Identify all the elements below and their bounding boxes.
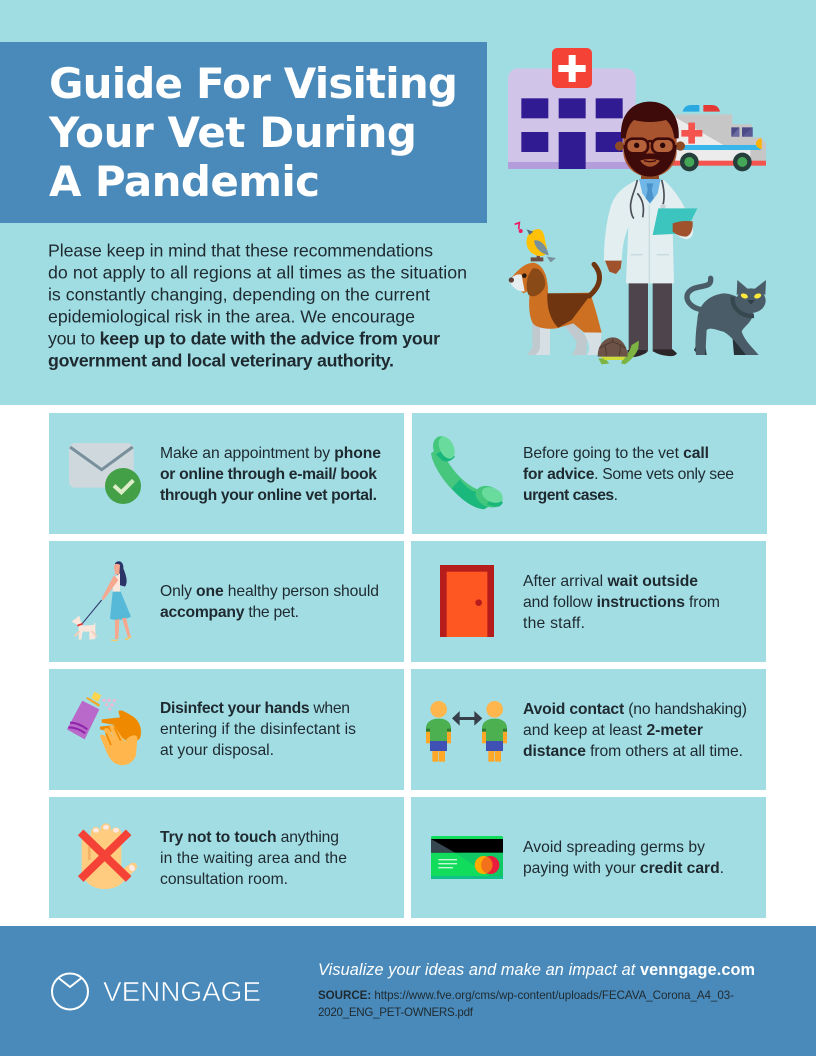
panel: call for advice bbox=[412, 413, 767, 534]
hero illustration: vet with hospital, ambulance and pets bbox=[508, 48, 766, 364]
text: do not touch: Try not to touch anything bbox=[160, 829, 339, 846]
text: appointment: or online through e-mail/ book bbox=[160, 466, 377, 483]
text: disinfect: at your disposal. bbox=[160, 742, 274, 759]
panel: credit card bbox=[411, 797, 766, 918]
text: call bbox=[523, 445, 734, 504]
text: call: Before going to the vet call bbox=[523, 445, 709, 462]
source citation bbox=[318, 989, 734, 1019]
text: do not touch: in the waiting area and the bbox=[160, 850, 347, 867]
text: avoid contact: distance from others at all time. bbox=[523, 743, 743, 760]
intro text block: government and local veterinary authority. bbox=[48, 350, 394, 370]
icon: green phone handset bbox=[429, 433, 506, 512]
text: wait outside: the staff. bbox=[523, 615, 585, 632]
text: credit card: paying with your credit card. bbox=[523, 860, 724, 877]
icon: gray cat bbox=[687, 278, 766, 355]
text: call: for advice. Some vets only see bbox=[523, 466, 734, 483]
intro text block: is constantly changing, depending on the current bbox=[48, 284, 430, 304]
text: disinfect bbox=[160, 700, 356, 759]
footer band bbox=[0, 926, 816, 1056]
text: disinfect: entering if the disinfectant is bbox=[160, 721, 356, 738]
panel: make an appointment bbox=[49, 413, 404, 534]
icon: woman walking dog bbox=[72, 561, 131, 641]
title: Guide For Visiting bbox=[49, 59, 458, 108]
icon: envelope with check mark bbox=[69, 443, 141, 504]
title: Your Vet During bbox=[48, 108, 417, 157]
icon: turtle bbox=[598, 337, 639, 364]
title: A Pandemic bbox=[49, 157, 320, 206]
icon: veterinarian bbox=[604, 102, 697, 357]
header section background bbox=[0, 0, 816, 405]
icon: hospital bbox=[508, 48, 636, 169]
panel: one healthy person bbox=[49, 541, 404, 662]
footer call to action: Visualize your ideas and make an impact at venngage.com bbox=[318, 961, 755, 979]
icon: hand with red cross bbox=[81, 823, 137, 889]
text: one person: Only one healthy person should bbox=[160, 583, 379, 600]
text: do not touch bbox=[160, 829, 347, 888]
title bbox=[48, 59, 458, 206]
intro text block: Please keep in mind that these recommendations bbox=[48, 240, 433, 260]
text: avoid contact: Avoid contact (no handshaking) bbox=[523, 701, 747, 718]
text: one person bbox=[160, 583, 379, 621]
source citation: 2020_ENG_PET-OWNERS.pdf bbox=[318, 1006, 474, 1019]
text: disinfect: Disinfect your hands when bbox=[160, 700, 350, 717]
panel: do not touch bbox=[49, 797, 404, 918]
source citation: SOURCE: https://www.fve.org/cms/wp-content/uploads/FECAVA_Corona_A4_03- bbox=[318, 989, 734, 1002]
icon: spray bottle and hands bbox=[67, 692, 141, 765]
text: credit card: Avoid spreading germs by bbox=[523, 839, 705, 856]
intro text block bbox=[48, 240, 467, 370]
intro text block: you to keep up to date with the advice from your bbox=[48, 328, 440, 348]
text: wait outside bbox=[523, 573, 720, 632]
text: one person: accompany the pet. bbox=[160, 604, 299, 621]
title banner bbox=[0, 42, 487, 223]
text: wait outside: After arrival wait outside bbox=[523, 573, 698, 590]
text: do not touch: consultation room. bbox=[160, 871, 288, 888]
panel: wait outside bbox=[411, 541, 766, 662]
panel: avoid contact bbox=[411, 669, 766, 790]
logo: Venngage bbox=[52, 974, 261, 1010]
text: appointment: Make an appointment by phone bbox=[160, 445, 381, 462]
icon: ambulance bbox=[672, 105, 766, 171]
text: avoid contact: and keep at least 2-meter bbox=[523, 722, 703, 739]
intro text block: do not apply to all regions at all times as the situation bbox=[48, 262, 467, 282]
text: wait outside: and follow instructions from bbox=[523, 594, 720, 611]
panel: disinfect hands bbox=[49, 669, 404, 790]
logo: Venngage: VENNGAGE bbox=[103, 976, 261, 1007]
icon: yellow bird bbox=[515, 223, 556, 262]
text: avoid contact bbox=[523, 701, 747, 760]
icon: beagle dog bbox=[509, 263, 602, 355]
text: appointment bbox=[160, 445, 381, 504]
icon: red door bbox=[440, 565, 494, 637]
intro text block: epidemiological risk in the area. We encourage bbox=[48, 306, 415, 326]
text: appointment: through your online vet portal. bbox=[160, 487, 377, 504]
text: credit card bbox=[523, 839, 724, 877]
icon: two people two meters apart bbox=[426, 701, 507, 762]
text: call: urgent cases. bbox=[523, 487, 618, 504]
icon: green credit card bbox=[431, 836, 503, 879]
